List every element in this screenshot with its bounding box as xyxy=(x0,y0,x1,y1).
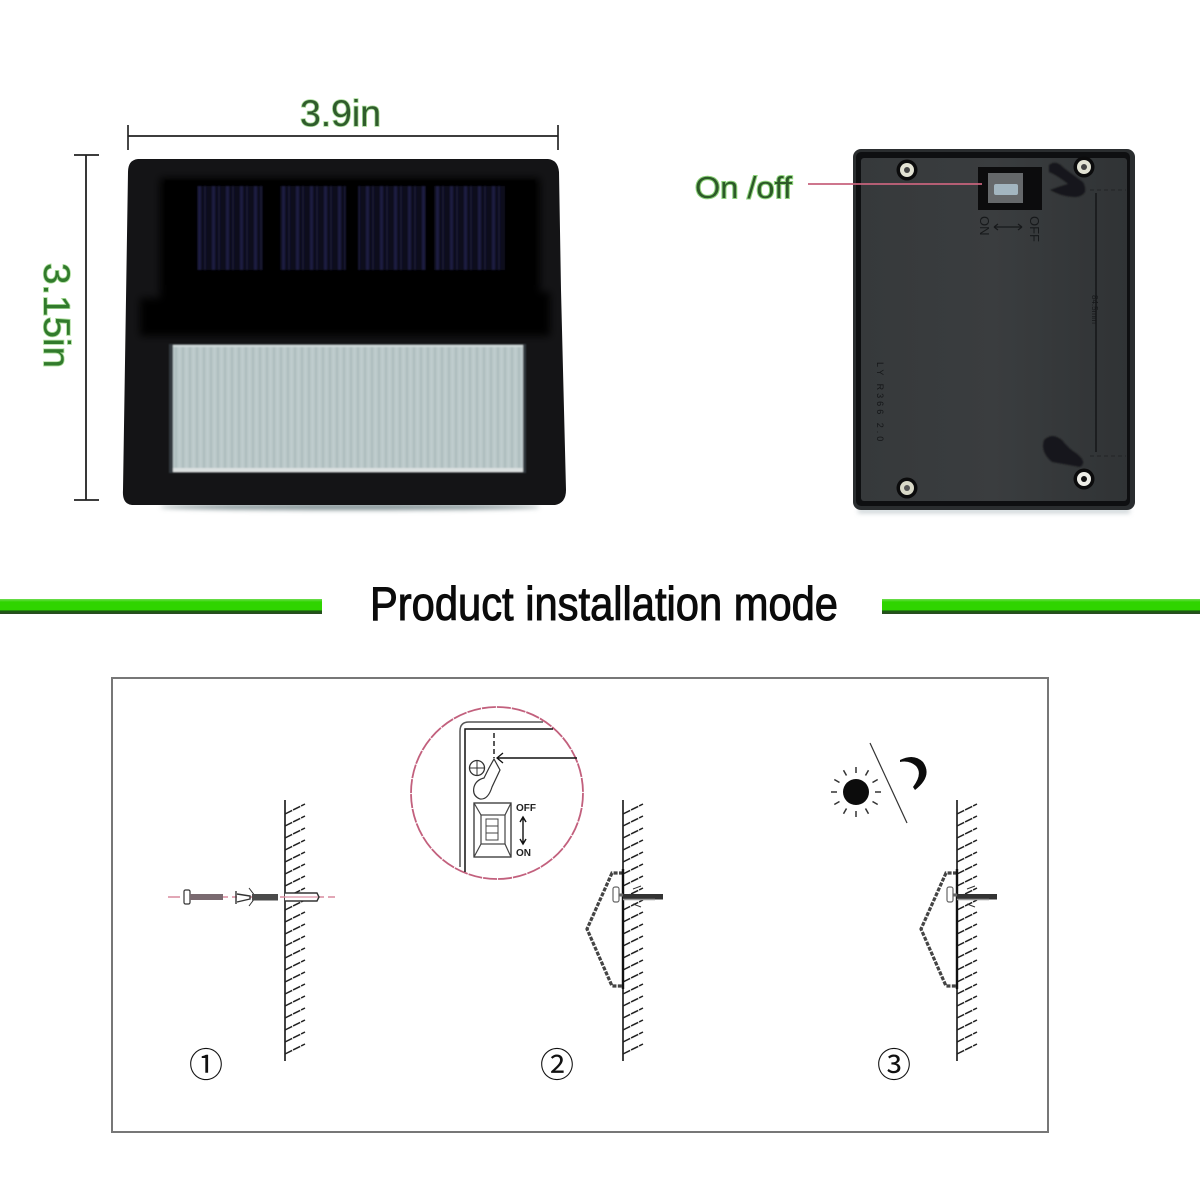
step number 3: ③ xyxy=(877,1038,911,1087)
magnified back detail: ON xyxy=(516,848,531,859)
LED diffuser xyxy=(169,344,526,473)
magnified back detail xyxy=(411,707,583,879)
right green bar xyxy=(882,599,1200,614)
step 3 xyxy=(831,743,997,1087)
screws xyxy=(896,156,1094,498)
drill hole xyxy=(285,893,319,901)
mounted light side view xyxy=(587,869,663,989)
moon icon xyxy=(900,757,927,790)
left green bar xyxy=(0,599,322,614)
panel border xyxy=(112,678,1048,1132)
dimension line embossed: 84.5mm xyxy=(1090,295,1099,324)
edge highlights xyxy=(132,298,134,312)
solar panel cells xyxy=(197,186,505,270)
wall with hatching xyxy=(285,800,305,1061)
wall anchor xyxy=(236,888,278,906)
dimension: height 3.15in xyxy=(36,155,99,500)
dimension line embossed xyxy=(1090,190,1126,456)
shadow under front view xyxy=(160,504,540,510)
embossed model text: LY R366 2.0 xyxy=(875,362,885,444)
heading: Product installation mode xyxy=(370,577,838,630)
sun icon xyxy=(831,767,881,817)
step number 2: ② xyxy=(540,1038,574,1087)
wall with hatching xyxy=(957,800,977,1061)
step number 1: ① xyxy=(189,1038,223,1087)
screw xyxy=(184,890,223,904)
magnified back detail: OFF xyxy=(516,803,536,814)
product photo: back view of solar light xyxy=(853,149,1135,513)
on/off switch: ON xyxy=(977,216,992,236)
keyhole slots xyxy=(1043,163,1085,467)
day-night divider xyxy=(870,743,907,823)
back housing xyxy=(853,149,1135,510)
mounted light side view xyxy=(921,869,997,989)
on/off switch xyxy=(977,167,1042,242)
on/off callout line xyxy=(808,183,982,185)
screw and anchor axis xyxy=(168,896,335,898)
panel: installation steps xyxy=(112,678,1048,1132)
product photo: front view of solar light xyxy=(123,159,566,510)
on/off label: On /off xyxy=(695,170,792,205)
light housing xyxy=(123,159,566,505)
shadow under back view xyxy=(858,509,1130,513)
step 1 xyxy=(168,800,335,1087)
wall with hatching xyxy=(623,800,643,1061)
on/off switch: OFF xyxy=(1027,216,1042,242)
step 2 xyxy=(411,707,663,1087)
dimension: width 3.9in: 3.9in xyxy=(300,93,381,134)
dimension: width 3.9in xyxy=(128,93,558,150)
dark solar recess xyxy=(140,178,550,336)
dimension: height 3.15in: 3.15in xyxy=(36,263,77,368)
